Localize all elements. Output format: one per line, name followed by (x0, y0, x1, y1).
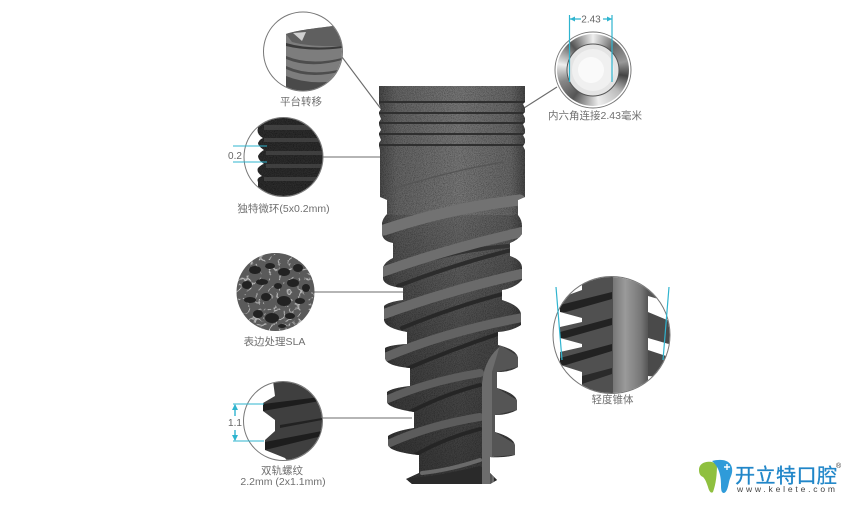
label: slight taper: 轻度锥体 (592, 393, 634, 406)
dimension: 1.1 (228, 404, 264, 441)
label: internal hex: 内六角连接2.43毫米 (548, 109, 642, 122)
dimension: 2.43: 2.43 (581, 14, 601, 26)
dental implant (379, 86, 525, 484)
icon: tooth (699, 460, 732, 493)
circle: double thread (244, 381, 325, 462)
thread bands (382, 162, 522, 473)
bottom flange (408, 466, 497, 484)
dimension: 1.1: 1.1 (228, 418, 242, 429)
label: double thread: 2.2mm (2x1.1mm) (240, 476, 326, 488)
dimension: 0.2 (228, 146, 267, 162)
label: platform switching: 平台转移 (280, 95, 322, 108)
logo: kelete: www.kelete.com (736, 484, 835, 494)
dimension: 0.2: 0.2 (228, 151, 242, 162)
label: micro rings: 独特微环(5x0.2mm) (237, 202, 330, 215)
logo: kelete: 开立特口腔 (735, 464, 837, 488)
label: double thread (240, 464, 326, 488)
vertical flute (482, 345, 502, 484)
circle: slight taper (553, 276, 672, 394)
logo: kelete: ® (836, 462, 842, 470)
label: double thread: 双轨螺纹 (261, 464, 303, 477)
circle: SLA surface (236, 253, 314, 331)
circle: platform switching (264, 12, 342, 92)
dimension: 2.43 (570, 14, 612, 82)
label: SLA: 表边处理SLA (244, 335, 305, 348)
logo: kelete (699, 460, 842, 494)
circle: internal hex connection (555, 32, 631, 108)
circle: micro rings (244, 117, 326, 197)
collar grooves (379, 102, 525, 145)
leader lines (314, 57, 557, 418)
